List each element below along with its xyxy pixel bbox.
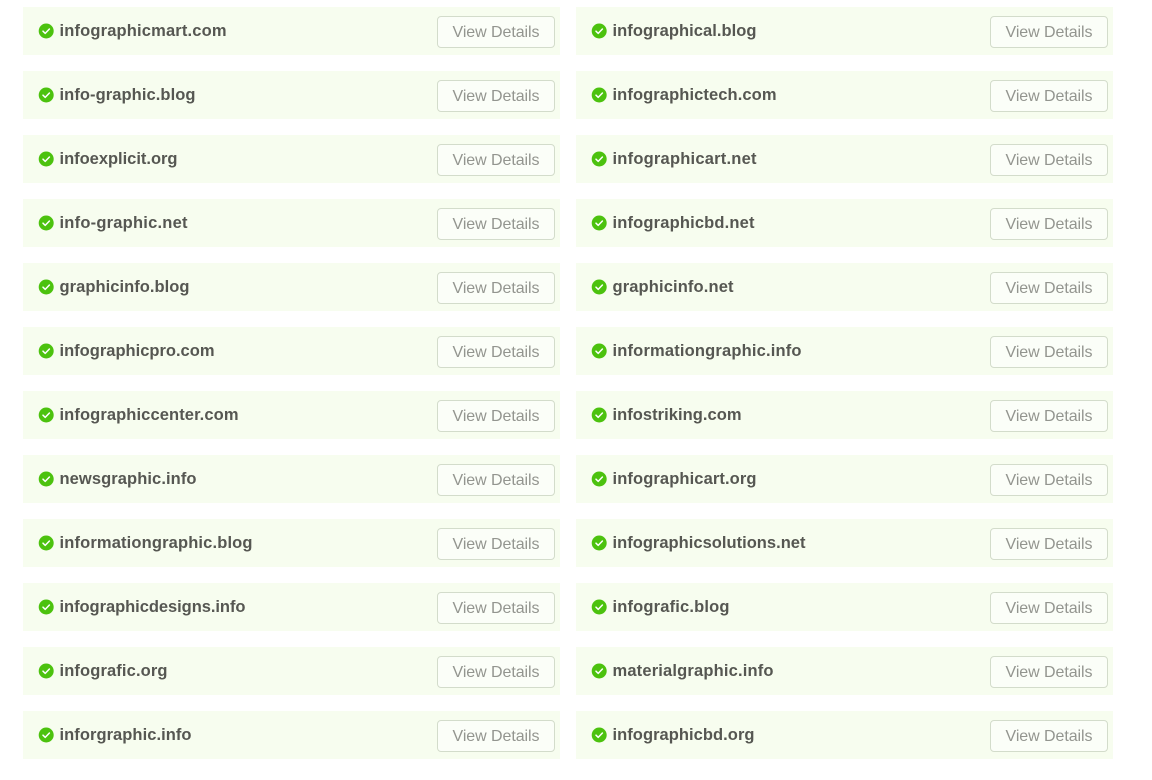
row: infographicbd.net: infographicbd.net — [612, 214, 755, 232]
row: infografic.blog: infografic.blog — [612, 598, 730, 616]
row: info-graphic.net: info-graphic.net — [60, 214, 188, 232]
row: infographicart.net: View Details — [1006, 152, 1092, 169]
row: graphicinfo.blog: graphicinfo.blog — [60, 278, 190, 296]
row: infographicpro.com — [23, 327, 560, 375]
row: graphicinfo.net — [576, 263, 1113, 311]
row: infostriking.com: infostriking.com — [612, 406, 742, 424]
row: infographicbd.net — [576, 199, 1113, 247]
row: newsgraphic.info: newsgraphic.info — [60, 470, 196, 488]
row: infoexplicit.org — [23, 135, 560, 183]
row: infographicmart.com: infographicmart.com — [60, 22, 226, 40]
row: informationgraphic.info: View Details — [1006, 344, 1092, 361]
row: info-graphic.blog — [23, 71, 560, 119]
row: infographicbd.org: View Details — [1006, 728, 1092, 745]
row: info-graphic.net: View Details — [452, 216, 540, 233]
row: infografic.blog: View Details — [1006, 600, 1092, 617]
row: info-graphic.blog: info-graphic.blog — [60, 86, 196, 104]
row: infographicbd.org: infographicbd.org — [612, 726, 754, 744]
row: infografic.org — [23, 647, 560, 695]
row: informationgraphic.info — [576, 327, 1113, 375]
row: infographicart.net — [576, 135, 1113, 183]
row: infographicsolutions.net — [576, 519, 1113, 567]
row: informationgraphic.info: informationgraphic.info — [612, 342, 802, 360]
row: info-graphic.net — [23, 199, 560, 247]
row: infografic.org: View Details — [452, 664, 540, 681]
row: materialgraphic.info: View Details — [1006, 664, 1092, 681]
row: materialgraphic.info: materialgraphic.info — [612, 662, 774, 680]
row: informationgraphic.blog: informationgraphic.blog — [60, 534, 252, 552]
row: infographicart.org: infographicart.org — [612, 470, 756, 488]
row: graphicinfo.blog — [23, 263, 560, 311]
row: inforgraphic.info: inforgraphic.info — [60, 726, 192, 744]
row: inforgraphic.info: View Details — [452, 728, 540, 745]
row: infographicdesigns.info — [23, 583, 560, 631]
row: graphicinfo.net: graphicinfo.net — [612, 278, 734, 296]
row: newsgraphic.info — [23, 455, 560, 503]
row: graphicinfo.net: View Details — [1006, 280, 1092, 297]
row: infographicsolutions.net: View Details — [1006, 536, 1092, 553]
row: infographical.blog: infographical.blog — [612, 22, 756, 40]
row: infographical.blog: View Details — [1006, 24, 1092, 41]
row: infographicdesigns.info: infographicdesigns.info — [60, 598, 246, 616]
row: infographicsolutions.net: infographicsolutions.net — [612, 534, 806, 552]
row: infographicart.org — [576, 455, 1113, 503]
row: informationgraphic.blog: View Details — [452, 536, 540, 553]
row: infographicbd.net: View Details — [1006, 216, 1092, 233]
row: infographicart.net: infographicart.net — [612, 150, 757, 168]
row: infographiccenter.com — [23, 391, 560, 439]
row: infographicmart.com — [23, 7, 560, 55]
row: inforgraphic.info — [23, 711, 560, 759]
row: infographicart.org: View Details — [1006, 472, 1092, 489]
row: infografic.org: infografic.org — [60, 662, 168, 680]
row: infographicdesigns.info: View Details — [452, 600, 540, 617]
row: infographical.blog — [576, 7, 1113, 55]
row: infographictech.com: infographictech.com — [612, 86, 776, 104]
row: infographictech.com — [576, 71, 1113, 119]
row: infoexplicit.org: View Details — [452, 152, 540, 169]
row: informationgraphic.blog — [23, 519, 560, 567]
row: infographicpro.com: View Details — [452, 344, 540, 361]
row: infografic.blog — [576, 583, 1113, 631]
row: infographicbd.org — [576, 711, 1113, 759]
row: graphicinfo.blog: View Details — [452, 280, 540, 297]
row: infographictech.com: View Details — [1006, 88, 1092, 105]
row: infoexplicit.org: infoexplicit.org — [60, 150, 178, 168]
row: newsgraphic.info: View Details — [452, 472, 540, 489]
row: infographiccenter.com: infographiccenter.com — [60, 406, 238, 424]
row: infographicpro.com: infographicpro.com — [60, 342, 214, 360]
row: infographiccenter.com: View Details — [452, 408, 540, 425]
row: infostriking.com: View Details — [1006, 408, 1092, 425]
row: infographicmart.com: View Details — [452, 24, 540, 41]
row: infostriking.com — [576, 391, 1113, 439]
row: materialgraphic.info — [576, 647, 1113, 695]
row: info-graphic.blog: View Details — [452, 88, 540, 105]
